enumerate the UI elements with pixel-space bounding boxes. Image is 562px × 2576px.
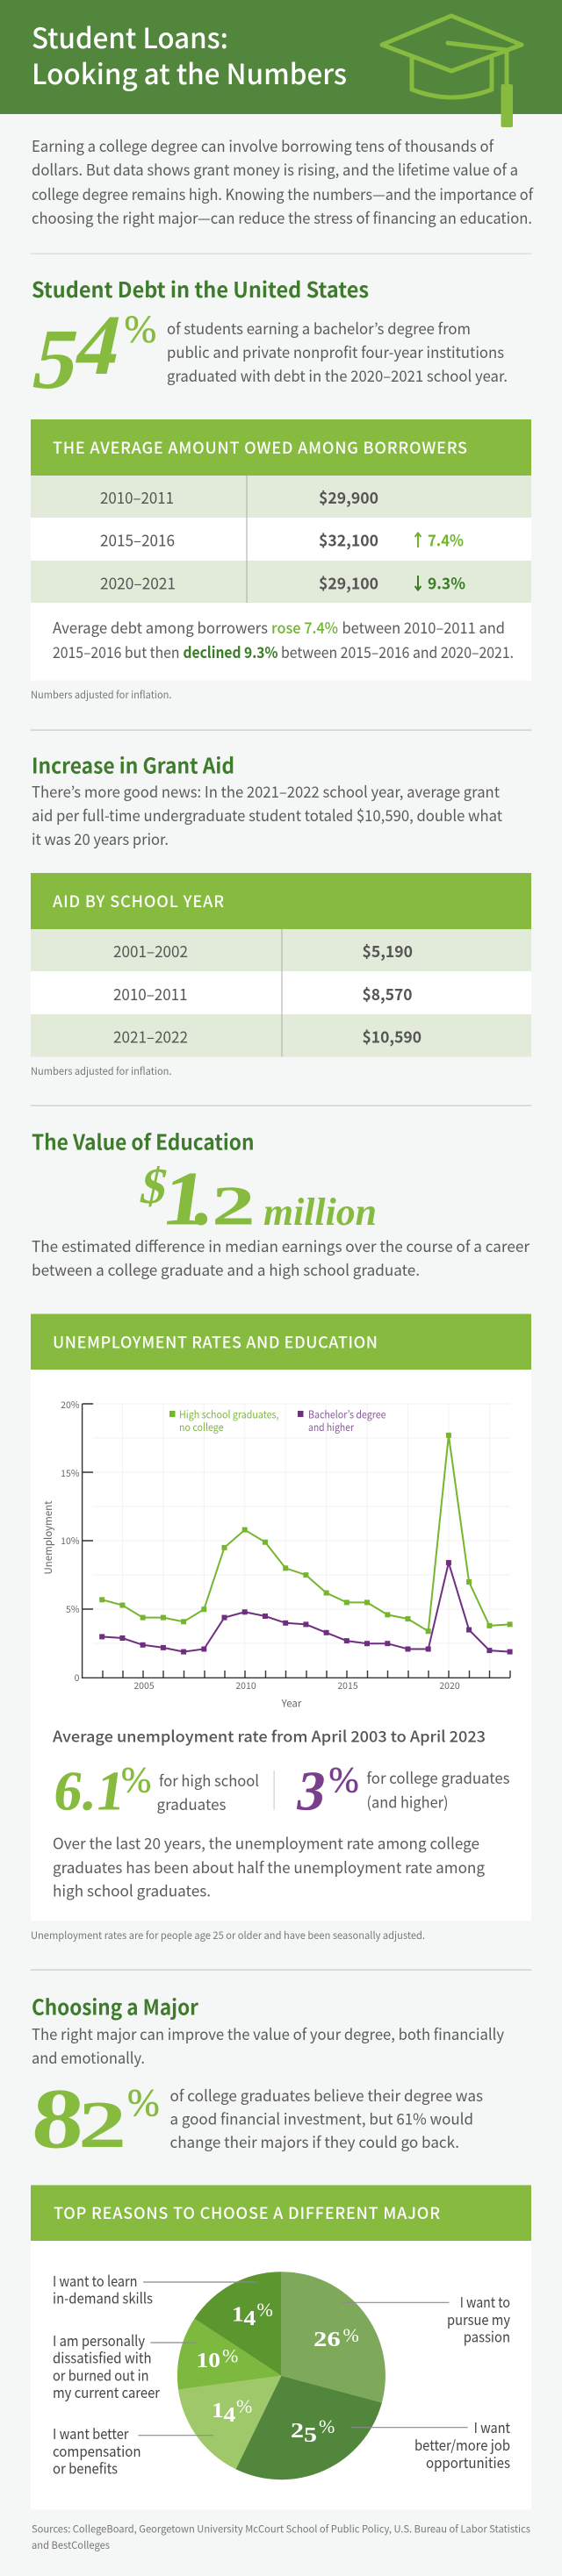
line chart [41, 1399, 510, 1711]
panel: aid by school year table: $5,190 [362, 940, 413, 962]
stat: 1.2 million: $ [135, 1158, 173, 1214]
panel: debt explanation: between 2010–2011 and [342, 617, 505, 639]
slice values: % [256, 2299, 273, 2321]
stat: 54 percent: 5 [25, 312, 88, 407]
label: job opportunities: opportunities [426, 2451, 510, 2472]
stat: 6.1 percent: % [121, 1759, 151, 1800]
label: dissatisfied [53, 2329, 161, 2402]
panel: aid by school year table: 2001–2002 [113, 940, 188, 962]
panel: average amount owed table: $29,100 [319, 572, 378, 595]
grant aid paragraph: it was 20 years prior. [32, 828, 169, 850]
intro paragraph: Earning a college degree can involve borrowing tens of thousands of [32, 135, 494, 157]
label: passion [447, 2291, 510, 2346]
y axis labels: 15% [61, 1467, 80, 1480]
panel: aid by school year table: $10,590 [362, 1025, 422, 1048]
intro paragraph [32, 135, 534, 229]
y axis labels: 0 [75, 1671, 80, 1685]
panel: aid by school year table [31, 873, 531, 1056]
pie chart [177, 2272, 385, 2479]
icon: graduation cap [382, 16, 522, 127]
y axis labels: 5% [66, 1603, 80, 1616]
label: learn skills: in-demand skills [53, 2286, 153, 2308]
x axis labels: 2015 [337, 1679, 358, 1692]
icon: up arrow [414, 533, 422, 547]
stat: 82 percent: % [127, 2081, 160, 2124]
unemployment paragraph [53, 1832, 485, 1902]
panel heading: TOP REASONS TO CHOOSE A DIFFERENT MAJOR [54, 2201, 440, 2224]
panel: average amount owed table [31, 419, 531, 603]
panel: average amount owed table: 9.3% [428, 572, 465, 595]
heading: grant aid: Increase in Grant Aid [32, 749, 234, 779]
stat: 6.1 percent: for high school [159, 1770, 259, 1792]
label: compensation: or benefits [53, 2457, 118, 2478]
value description: The estimated difference in median earnings over the course of a career [32, 1235, 530, 1257]
panel: average amount owed table: 2010–2011 [100, 486, 174, 509]
stat description [167, 318, 508, 387]
unemployment paragraph: Over the last 20 years, the unemployment rate among college [53, 1832, 479, 1855]
stat: 3 percent: for college graduates [367, 1767, 509, 1789]
footnote: Numbers adjusted for inflation. [31, 1064, 172, 1078]
stat description: graduated with debt in the 2020–2021 school year. [167, 365, 508, 387]
stat: 6.1 percent: 6.1 [50, 1760, 129, 1821]
stat: 1.2 million: 1 [157, 1156, 213, 1241]
label: learn skills: I want to learn [53, 2270, 137, 2291]
label: job opportunities [414, 2416, 510, 2472]
slice values: 1 [212, 2399, 224, 2422]
stat: 54 percent: % [125, 307, 156, 351]
grant aid paragraph: There’s more good news: In the 2021–2022 school year, average grant [32, 781, 500, 803]
stat: 1.2 million: . [191, 1156, 211, 1242]
slice values: % [319, 2415, 335, 2437]
panel: average amount owed table: 2015–2016 [100, 528, 175, 551]
panel: aid by school year table: 2010–2011 [113, 983, 188, 1005]
stat: 3 percent [292, 1759, 509, 1821]
y axis labels: 10% [61, 1535, 80, 1548]
grant aid paragraph: aid per full-time undergraduate student totaled $10,590, double what [32, 805, 502, 826]
label: compensation [53, 2422, 140, 2478]
leader lines [139, 2282, 468, 2436]
stat: 82 percent [30, 2072, 160, 2166]
slice values [197, 2299, 359, 2446]
intro paragraph: dollars. But data shows grant money is rising, and the lifetime value of a [32, 159, 518, 181]
footnote: Unemployment rates are for people age 25 or older and have been seasonally adjusted. [31, 1928, 425, 1943]
panel: average amount owed table: $32,100 [319, 528, 378, 551]
label: learn skills [53, 2270, 153, 2308]
x axis title: Year [281, 1697, 302, 1711]
label: passion: passion [464, 2325, 510, 2346]
title [32, 17, 347, 93]
legend [169, 1407, 386, 1435]
stat: 3 percent: % [328, 1759, 359, 1800]
intro paragraph: choosing the right major—can reduce the stress of financing an education. [32, 207, 532, 229]
slice values: 2 [291, 2419, 304, 2442]
panel: top reasons [31, 2185, 531, 2509]
slice values: 10 [197, 2349, 220, 2372]
series: bachelor's degree [102, 1563, 510, 1652]
label: passion: I want to [460, 2291, 510, 2312]
value description [32, 1235, 530, 1281]
panel: debt explanation: 2015–2016 but then [53, 641, 179, 663]
major paragraph: and emotionally. [32, 2047, 145, 2069]
stat: 1.2 million [135, 1156, 377, 1242]
panel: aid by school year table: $8,570 [362, 983, 413, 1005]
stat description: change their majors if they could go back. [170, 2131, 459, 2153]
heading: value of education: The Value of Education [32, 1125, 255, 1156]
stat description: public and private nonprofit four-year institutions [167, 341, 504, 363]
legend: no college [179, 1420, 224, 1435]
panel: average amount owed table: $29,900 [319, 486, 378, 509]
major paragraph: The right major can improve the value of your degree, both financially [32, 2023, 504, 2045]
y axis labels [61, 1399, 80, 1685]
heading: student debt: Student Debt in the United States [32, 273, 369, 304]
stat: 6.1 percent [50, 1759, 259, 1821]
icon: down arrow [414, 576, 422, 590]
slice values: 4 [244, 2307, 256, 2330]
stat description [170, 2085, 483, 2153]
label: dissatisfied: my current career [53, 2381, 161, 2402]
stat description: a good financial investment, but 61% would [170, 2107, 473, 2130]
title: Student Loans: [32, 17, 228, 57]
slice values: 26 [313, 2327, 341, 2351]
panel: aid by school year table: 2021–2022 [113, 1025, 188, 1048]
legend: High school graduates, [179, 1407, 279, 1421]
stat description: of college graduates believe their degree was [170, 2085, 483, 2107]
slice values: % [236, 2395, 252, 2417]
label: compensation: I want better [53, 2422, 129, 2444]
label: dissatisfied: dissatisfied with [53, 2346, 151, 2367]
sources: and BestColleges [32, 2538, 110, 2552]
label: job opportunities: better/more job [414, 2434, 510, 2455]
label: passion: pursue my [447, 2308, 510, 2329]
y axis title: Unemployment [41, 1500, 55, 1575]
intro paragraph: college degree remains high. Knowing the numbers—and the importance of [32, 183, 534, 205]
slice values: 5 [304, 2423, 317, 2446]
title: Looking at the Numbers [32, 53, 347, 93]
stat: 3 percent: (and higher) [367, 1792, 448, 1813]
slice values: 4 [223, 2403, 235, 2427]
label: compensation: compensation [53, 2440, 140, 2461]
unemployment paragraph: high school graduates. [53, 1879, 211, 1902]
panel: debt explanation: between 2015–2016 and 2020–2021. [281, 641, 514, 663]
stat: 1.2 million: 2 [212, 1176, 256, 1237]
sources [32, 2522, 530, 2552]
slice values: 1 [232, 2302, 244, 2326]
stat: 82 percent: 2 [78, 2088, 126, 2162]
label: dissatisfied: I am personally [53, 2329, 145, 2351]
grant aid paragraph [32, 781, 502, 850]
heading: choosing a major: Choosing a Major [32, 1990, 198, 2021]
footnote: Numbers adjusted for inflation. [31, 688, 172, 702]
table heading: AID BY SCHOOL YEAR [53, 890, 224, 912]
stat: 82 percent: 8 [30, 2072, 86, 2166]
panel: unemployment rates [31, 1314, 531, 1921]
panel: debt explanation: rose 7.4% [271, 617, 338, 639]
value description: between a college graduate and a high school graduate. [32, 1259, 420, 1281]
stat: 54 percent [25, 298, 156, 407]
panel: debt explanation: Average debt among borrowers [53, 617, 268, 639]
header banner [0, 0, 562, 114]
panel heading: UNEMPLOYMENT RATES AND EDUCATION [53, 1330, 378, 1353]
stat: 3 percent: 3 [292, 1760, 331, 1821]
stat description: of students earning a bachelor’s degree from [167, 318, 471, 340]
x axis labels: 2005 [133, 1679, 155, 1692]
average rate heading: Average unemployment rate from April 2003 to April 2023 [53, 1725, 486, 1748]
panel: average amount owed table: 7.4% [428, 528, 464, 551]
panel: debt explanation [31, 603, 531, 681]
panel: average amount owed table: 2020–2021 [100, 572, 176, 595]
series: high school graduates [102, 1435, 510, 1631]
table heading: THE AVERAGE AMOUNT OWED AMONG BORROWERS [53, 436, 467, 459]
stat: 1.2 million: million [263, 1191, 377, 1234]
x axis labels [133, 1679, 460, 1692]
slice values: % [222, 2344, 238, 2367]
label: dissatisfied: or burned out in [53, 2364, 149, 2385]
stat: 54 percent: 4 [68, 298, 130, 393]
sources: Sources: CollegeBoard, Georgetown University McCourt School of Public Policy, U.S. Bureau of Labor Statistics [32, 2522, 530, 2536]
unemployment paragraph: graduates has been about half the unemployment rate among [53, 1857, 485, 1878]
stat: 6.1 percent: graduates [156, 1793, 227, 1815]
legend: and higher [308, 1420, 354, 1435]
y axis labels: 20% [61, 1399, 80, 1412]
slice values: % [342, 2324, 359, 2346]
label: job opportunities: I want [474, 2416, 510, 2437]
panel: debt explanation: declined 9.3% [183, 641, 278, 663]
major paragraph [32, 2023, 504, 2069]
legend: Bachelor’s degree [308, 1407, 386, 1421]
x axis labels: 2020 [439, 1679, 460, 1692]
x axis labels: 2010 [235, 1679, 256, 1692]
